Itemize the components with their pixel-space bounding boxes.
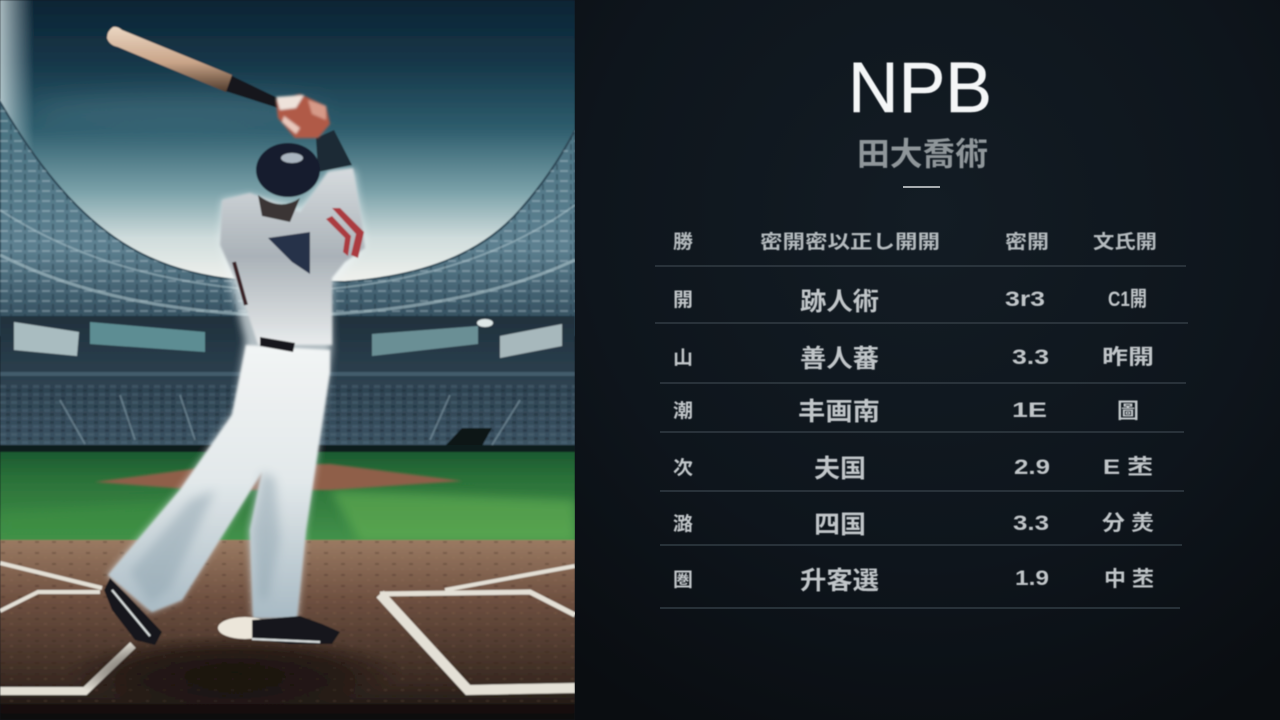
upper deck of stadium bbox=[0, 102, 575, 335]
title divider bbox=[903, 186, 940, 188]
chest panel bbox=[268, 232, 310, 274]
outfield grass bbox=[0, 445, 575, 542]
table row 6: 1.9 bbox=[1015, 567, 1049, 590]
table row 6: 圏 bbox=[673, 569, 693, 591]
hands bbox=[276, 94, 330, 138]
panel: stadium photo with batter bbox=[0, 0, 575, 719]
table row 2: 善人蕃 bbox=[800, 345, 879, 373]
table row 6: 中 苤 bbox=[1104, 568, 1154, 591]
table row 5: 四国 bbox=[814, 511, 866, 539]
stadium signs bbox=[14, 319, 562, 358]
pitcher's mound bbox=[95, 464, 462, 490]
player shadow bbox=[65, 634, 405, 710]
pant shadows bbox=[130, 472, 280, 604]
table header: 密開密以正し開開 bbox=[760, 231, 940, 253]
table row 1 bbox=[673, 288, 1147, 316]
panel: NPB table bbox=[655, 0, 1188, 609]
scene group bbox=[0, 0, 575, 720]
table row 6: 升客選 bbox=[800, 567, 879, 595]
table row 4: 次 bbox=[673, 457, 693, 479]
infield dirt bbox=[0, 540, 575, 720]
table row 2 bbox=[673, 345, 1154, 373]
table rules bbox=[655, 266, 1188, 608]
table row 5: 分 羙 bbox=[1102, 512, 1154, 535]
table row 4 bbox=[673, 455, 1153, 483]
red sleeve stripes bbox=[326, 208, 364, 258]
table header: 勝 bbox=[673, 231, 693, 253]
pants bbox=[108, 345, 330, 618]
table row 2: 昨開 bbox=[1102, 346, 1154, 369]
table row 2: 3.3 bbox=[1012, 346, 1049, 369]
table row 3: 圖 bbox=[1117, 400, 1139, 423]
table row 5: 潞 bbox=[673, 513, 693, 535]
table row 3: 潮 bbox=[673, 400, 693, 422]
sky bbox=[0, 0, 575, 340]
front shoe bbox=[252, 616, 340, 644]
title: NPB bbox=[848, 49, 992, 128]
glow around batter bbox=[108, 170, 365, 618]
bat bbox=[107, 27, 282, 108]
helmet bbox=[256, 143, 320, 222]
jersey bbox=[220, 168, 365, 345]
bottom shade bbox=[0, 704, 575, 720]
table row 4: 2.9 bbox=[1014, 456, 1050, 479]
table row 1: 開 bbox=[673, 290, 693, 311]
table row 5 bbox=[673, 511, 1154, 539]
back shoe bbox=[104, 578, 162, 645]
table row 3 bbox=[673, 398, 1139, 426]
jersey side trim bbox=[234, 262, 246, 305]
arm, dark sleeve bbox=[316, 130, 352, 172]
table row 4: E 苤 bbox=[1103, 456, 1153, 479]
table row 1: 跡人術 bbox=[800, 288, 879, 316]
table row 1: 3r3 bbox=[1005, 288, 1045, 311]
batter's box lines bbox=[0, 563, 575, 691]
table row 6 bbox=[673, 567, 1154, 595]
table row 5: 3.3 bbox=[1013, 512, 1049, 535]
home plate bbox=[218, 617, 272, 639]
table row 2: 山 bbox=[673, 347, 693, 369]
table row 3: 丰画南 bbox=[798, 398, 880, 426]
table header: 文氏開 bbox=[1093, 231, 1157, 253]
table row 3: 1E bbox=[1012, 399, 1047, 422]
batter bbox=[104, 27, 365, 645]
table header: 密開 bbox=[1005, 231, 1049, 253]
lower stands and crowd bbox=[0, 316, 575, 450]
belt bbox=[260, 337, 295, 352]
table row 4: 夫国 bbox=[814, 455, 866, 483]
subtitle: 田大喬術 bbox=[857, 136, 988, 172]
table header bbox=[673, 231, 1157, 253]
table row 1: C1開 bbox=[1108, 288, 1147, 311]
